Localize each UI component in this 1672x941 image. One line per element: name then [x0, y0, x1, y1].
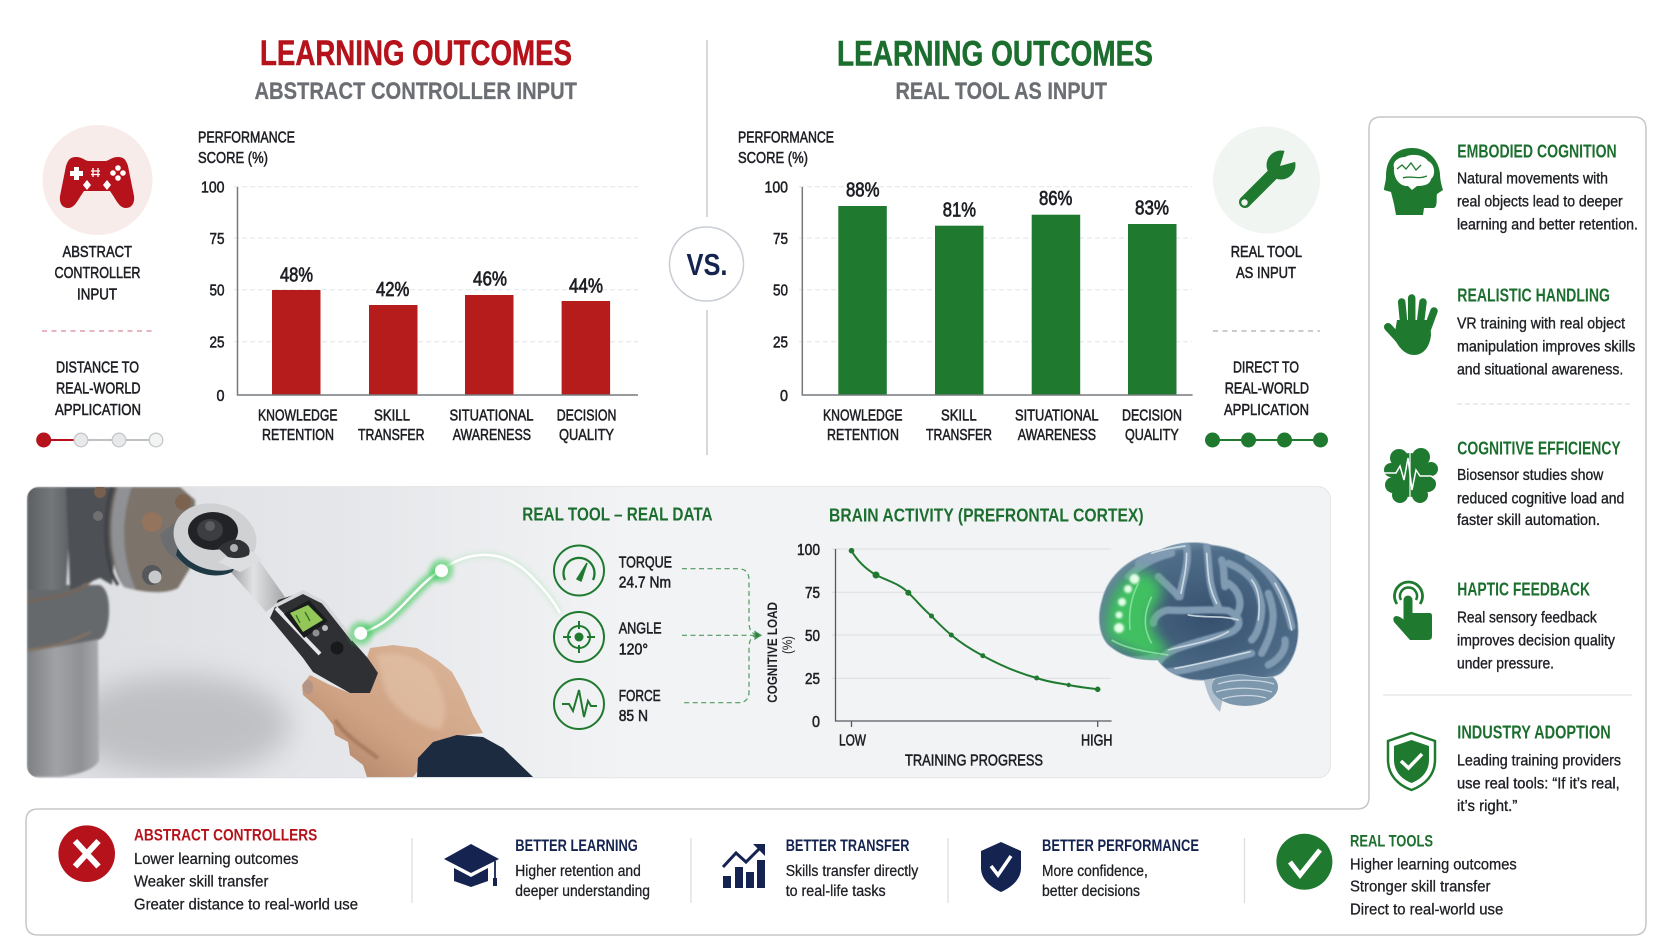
label: distance to real-world application: REAL-WORLD [56, 381, 141, 398]
category labels: SITUATIONAL [1015, 408, 1099, 425]
line chart: cognitive load over training progress: 0 [812, 714, 820, 731]
text block: to real-life tasks [786, 883, 886, 900]
category labels: KNOWLEDGE [258, 408, 338, 425]
category labels: QUALITY [1125, 427, 1179, 444]
feature: industry adoption: INDUSTRY ADOPTION [1457, 722, 1611, 742]
text block: Stronger skill transfer [1350, 879, 1491, 896]
metric: torque: TORQUE [619, 554, 672, 571]
metric: angle: ANGLE [619, 621, 662, 638]
bar chart: abstract controller: 100 [201, 180, 225, 196]
text block [1457, 315, 1636, 378]
icon: game controller [42, 125, 152, 235]
wrench handle [270, 592, 380, 693]
line chart: cognitive load over training progress: HIGH [1081, 733, 1112, 750]
bar values [846, 180, 1169, 222]
category labels [823, 408, 1182, 444]
y-axis label: (%) [780, 636, 795, 654]
label: real tool as input [1231, 244, 1302, 282]
text block: real objects lead to deeper [1457, 194, 1623, 211]
text block: Greater distance to real-world use [134, 896, 358, 913]
scale: direct indicator [1205, 432, 1328, 448]
text block [515, 863, 650, 900]
text block [1457, 753, 1621, 815]
summary strip: real tools: REAL TOOLS [1350, 832, 1433, 851]
label: distance to real-world application: APPLICATION [55, 402, 141, 419]
bars: knowledge, skill, situational, decision [838, 206, 1176, 395]
bar chart: real tool: 25 [773, 334, 788, 352]
text block [786, 863, 918, 900]
heading: brain activity: BRAIN ACTIVITY (PREFRONTAL CORTEX) [829, 506, 1144, 526]
label: distance to real-world application [55, 360, 141, 419]
summary strip: better transfer: BETTER TRANSFER [786, 836, 909, 855]
summary strip: real tools [1276, 832, 1517, 918]
wrench head [176, 548, 234, 576]
label: direct to real-world application: APPLICATION [1224, 402, 1309, 419]
category labels: AWARENESS [453, 427, 531, 444]
summary strip: better transfer [723, 836, 918, 900]
category labels: RETENTION [262, 427, 334, 444]
icon: graduation cap [444, 844, 499, 887]
metric: force [554, 679, 661, 729]
text block: and situational awareness. [1457, 361, 1623, 378]
category labels: SKILL [941, 408, 977, 425]
summary strip: better performance [981, 836, 1199, 900]
icon: wrench [1213, 126, 1320, 234]
bar chart: abstract controller: 50 [210, 282, 225, 300]
text block: it’s right.” [1457, 798, 1517, 815]
text block: deeper understanding [515, 883, 650, 900]
bar values [280, 265, 603, 301]
prefrontal glow [1106, 572, 1172, 660]
category labels [258, 408, 616, 444]
bar values: 88% [846, 180, 880, 202]
glowing data curve [360, 570, 441, 633]
metric: torque [554, 546, 672, 596]
text block: Natural movements with [1457, 170, 1608, 187]
lower cylinder [27, 640, 99, 777]
bar values: 83% [1135, 197, 1169, 219]
heading: abstract controller: ABSTRACT CONTROLLER INPUT [254, 78, 577, 105]
feature: realistic handling: REALISTIC HANDLING [1457, 286, 1610, 306]
panel: real tool real data and brain activity [27, 486, 1330, 778]
category labels: SKILL [374, 408, 410, 425]
heading: abstract controller [254, 34, 577, 105]
sleeve [27, 585, 109, 652]
text block: Real sensory feedback [1457, 610, 1597, 627]
icon: green check [1276, 834, 1332, 890]
summary strip: better learning: BETTER LEARNING [515, 836, 638, 855]
dashed bracket connector with arrow [682, 569, 761, 703]
summary strip: abstract controllers [58, 825, 358, 913]
category labels: DECISION [557, 408, 616, 425]
summary strip: better learning [444, 836, 650, 900]
left column: abstract controller input [36, 125, 163, 448]
feature: cognitive efficiency: COGNITIVE EFFICIENCY [1457, 438, 1621, 458]
metric: angle [554, 612, 662, 662]
line chart: cognitive load over training progress [765, 542, 1112, 770]
category labels: DECISION [1122, 408, 1182, 425]
summary strip: better performance: BETTER PERFORMANCE [1042, 836, 1199, 855]
category labels: QUALITY [559, 427, 614, 444]
versus divider: VS. [686, 247, 728, 282]
heading: real tool: LEARNING OUTCOMES [837, 34, 1153, 74]
wrench display [284, 600, 328, 638]
label: direct to real-world application: DIRECT TO [1233, 360, 1299, 377]
feature: realistic handling [1388, 286, 1636, 378]
text block [1457, 610, 1615, 672]
icon: hand [1388, 298, 1434, 355]
wrench shaft [231, 562, 285, 612]
feature: haptic feedback [1393, 580, 1615, 672]
bar chart: abstract controller: 75 [210, 231, 225, 248]
upper pipe [27, 487, 72, 590]
text block: learning and better retention. [1457, 216, 1638, 233]
label: abstract controller input: ABSTRACT [62, 244, 132, 261]
feature: embodied cognition [1384, 141, 1638, 233]
text block [1457, 170, 1638, 233]
flange [110, 487, 195, 592]
category labels: KNOWLEDGE [823, 408, 902, 425]
bars: knowledge, skill, situational, decision [272, 290, 610, 395]
heading: real tool real data: REAL TOOL – REAL DATA [522, 505, 713, 525]
line chart: cognitive load over training progress: LOW [839, 733, 867, 750]
bar values: 44% [569, 275, 603, 297]
metric: angle: 120° [619, 641, 648, 658]
label: distance to real-world application: DISTANCE TO [56, 360, 139, 377]
text block: Biosensor studies show [1457, 467, 1604, 484]
bar chart: real tool: 0 [780, 388, 788, 405]
text block: better decisions [1042, 883, 1140, 900]
text block: faster skill automation. [1457, 512, 1600, 529]
photo: torque wrench on pipe flange held by hand [27, 486, 1330, 778]
metric: force: 85 N [619, 708, 648, 725]
label: direct to real-world application: REAL-WORLD [1225, 381, 1309, 398]
y-axis label: COGNITIVE LOAD [765, 602, 780, 703]
text block: Direct to real-world use [1350, 901, 1503, 918]
gyri ridges [1112, 545, 1292, 672]
metric: torque: 24.7 Nm [619, 575, 671, 592]
line chart: cognitive load over training progress: 75 [805, 585, 820, 602]
icon: shield check [1388, 733, 1435, 790]
flange bolts [93, 486, 191, 585]
text block: reduced cognitive load and [1457, 490, 1624, 507]
feature: haptic feedback: HAPTIC FEEDBACK [1457, 580, 1590, 600]
icon: navy shield check [981, 842, 1021, 892]
text block: improves decision quality [1457, 633, 1615, 650]
label: real tool as input: REAL TOOL [1231, 244, 1302, 261]
shadow under pipe [70, 675, 290, 775]
text block: Weaker skill transfer [134, 874, 269, 891]
bar values: 86% [1039, 188, 1073, 210]
feature: embodied cognition: EMBODIED COGNITION [1457, 141, 1617, 161]
bar chart: abstract controller: SCORE (%) [198, 150, 268, 167]
category labels: RETENTION [827, 427, 899, 444]
icon: touch pointer [1393, 582, 1432, 640]
bar values: 81% [943, 200, 976, 222]
text block [1457, 467, 1624, 529]
text block: VR training with real object [1457, 315, 1626, 332]
bar chart: abstract controller: 25 [210, 334, 225, 352]
metric: force: FORCE [619, 688, 661, 705]
scale: distance indicator [36, 432, 163, 448]
bar chart: abstract controller [198, 130, 638, 444]
category labels: TRANSFER [358, 427, 424, 444]
category labels: TRANSFER [926, 427, 992, 444]
label: abstract controller input: INPUT [77, 286, 117, 304]
line chart: cognitive load over training progress: 50 [805, 628, 820, 645]
bar values: 48% [280, 265, 313, 287]
right column: real tool input [1205, 126, 1328, 448]
bar chart: real tool: 100 [764, 180, 788, 196]
bar chart: abstract controller: PERFORMANCE [198, 130, 295, 147]
label: abstract controller input: CONTROLLER [54, 265, 140, 282]
text block: manipulation improves skills [1457, 339, 1636, 356]
text block: under pressure. [1457, 655, 1554, 672]
sleeve [417, 735, 533, 777]
text block: Skills transfer directly [786, 863, 918, 880]
icon: growth chart [723, 844, 765, 888]
icon: head with brain [1384, 148, 1443, 215]
text block: Higher learning outcomes [1350, 856, 1517, 873]
y-axis label [765, 602, 795, 703]
bar chart: real tool: 75 [773, 231, 788, 248]
bar chart: abstract controller: 0 [216, 388, 225, 405]
line chart: cognitive load over training progress: TRAINING PROGRESS [905, 753, 1043, 770]
line chart: cognitive load over training progress: 100 [797, 542, 820, 559]
illustration: brain with glowing prefrontal cortex [1099, 543, 1298, 712]
category labels: SITUATIONAL [450, 408, 534, 425]
text block [1042, 863, 1148, 900]
heading: real tool [837, 34, 1153, 105]
text block: More confidence, [1042, 863, 1148, 880]
feature: cognitive efficiency [1384, 438, 1624, 529]
text block: Lower learning outcomes [134, 851, 298, 868]
text block: Leading training providers [1457, 753, 1621, 770]
text block: Higher retention and [515, 863, 641, 880]
text block: use real tools: “If it’s real, [1457, 775, 1620, 792]
text block [134, 851, 358, 913]
line chart: cognitive load over training progress: 25 [805, 671, 820, 688]
label: direct to real-world application [1224, 360, 1309, 419]
category labels: AWARENESS [1018, 427, 1096, 444]
bar chart: real tool: 50 [773, 282, 788, 300]
icon: brain with pulse [1384, 448, 1439, 503]
bar chart: real tool [738, 130, 1193, 444]
hand [302, 645, 483, 777]
label: abstract controller input [54, 244, 140, 304]
icon: red cross [58, 825, 115, 882]
versus divider [670, 40, 744, 455]
bar chart: real tool: PERFORMANCE [738, 130, 834, 147]
bar values: 46% [473, 269, 507, 291]
feature: industry adoption [1388, 722, 1621, 815]
label: real tool as input: AS INPUT [1236, 265, 1296, 282]
bar values: 42% [376, 279, 410, 301]
heading: real tool: REAL TOOL AS INPUT [896, 78, 1107, 105]
heading: abstract controller: LEARNING OUTCOMES [260, 34, 572, 73]
bar chart: real tool: SCORE (%) [738, 150, 808, 167]
summary strip: abstract controllers: ABSTRACT CONTROLLERS [134, 826, 317, 845]
text block [1350, 856, 1517, 918]
